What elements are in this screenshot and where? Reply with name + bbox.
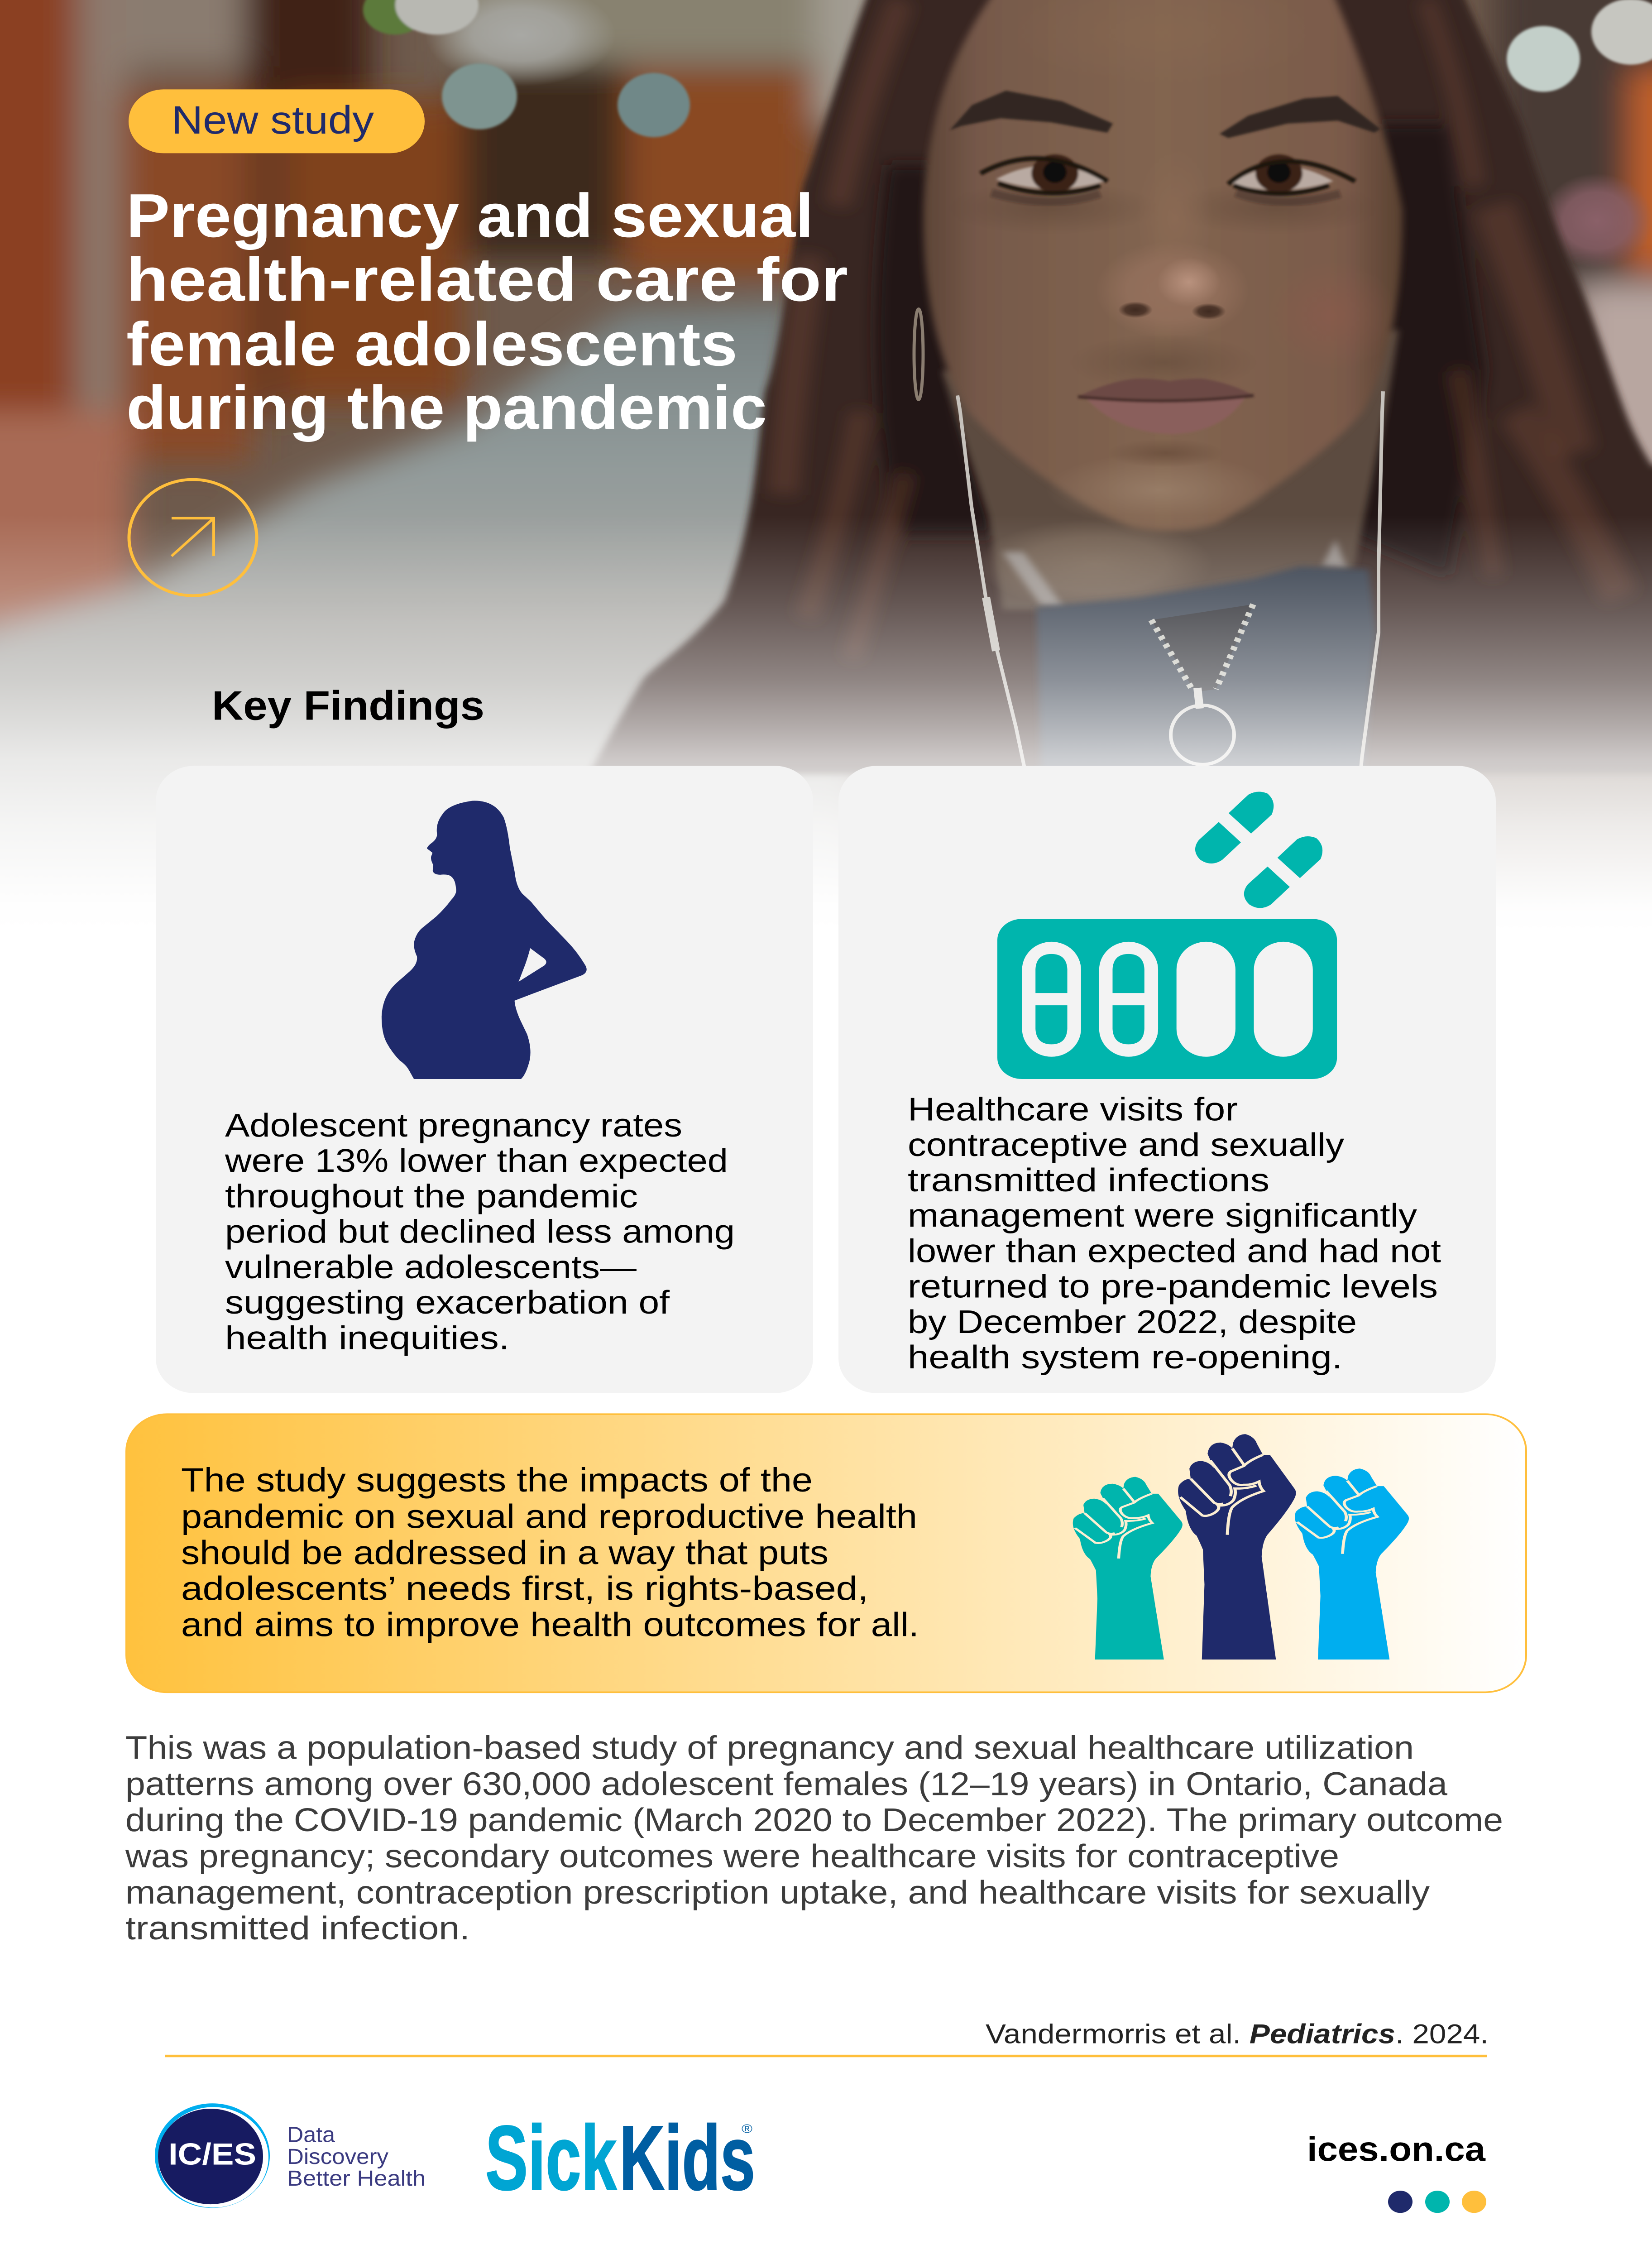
text block: study description: patterns among over 630,000 adolescent females (12–19 years) in Ontario, Canada — [125, 1766, 1447, 1803]
jacket — [1036, 566, 1376, 774]
text: healthcare visits: by December 2022, despite — [908, 1304, 1357, 1340]
brand dots — [1388, 2191, 1486, 2213]
logo tagline: Data — [287, 2122, 335, 2147]
hair — [589, 0, 1652, 774]
citation: Vandermorris et al. Pediatrics. 2024. — [986, 2019, 1489, 2049]
text block: study description — [125, 1730, 1503, 1947]
text block: study description: during the COVID-19 pandemic (March 2020 to December 2022). The primary outcome — [125, 1802, 1503, 1838]
text: healthcare visits: health system re-opening. — [908, 1339, 1342, 1376]
text: pregnancy rates: health inequities. — [225, 1320, 509, 1357]
text: healthcare visits: lower than expected and had not — [908, 1233, 1441, 1270]
text: callout message: should be addressed in a way that puts — [181, 1534, 828, 1572]
face — [924, 0, 1403, 531]
text: pregnancy rates: suggesting exacerbation of — [225, 1284, 670, 1321]
title: health-related care for — [126, 245, 848, 314]
logo: IC/ES — [155, 2103, 426, 2208]
logo tagline — [287, 2122, 426, 2191]
text block: study description: transmitted infection. — [125, 1910, 470, 1947]
text: callout message: pandemic on sexual and reproductive health — [181, 1497, 917, 1535]
lips — [1078, 379, 1254, 434]
text: healthcare visits — [908, 1091, 1441, 1376]
logo: SickKids: Sick — [485, 2107, 617, 2209]
title — [126, 181, 848, 442]
text: callout message: and aims to improve health outcomes for all. — [181, 1606, 919, 1644]
background photo: young woman with earphones — [0, 0, 1652, 1055]
badge: New study: New study — [172, 98, 374, 142]
icon: blister pack and pills — [997, 792, 1337, 1079]
text: pregnancy rates — [225, 1107, 735, 1357]
text block: study description: management, contraception prescription uptake, and healthcare visits for sexually — [125, 1874, 1430, 1911]
heading: Key Findings: Key Findings — [212, 682, 484, 729]
text: healthcare visits: Healthcare visits for — [908, 1091, 1238, 1128]
title: Pregnancy and sexual — [126, 181, 814, 250]
badge: New study — [129, 89, 425, 153]
text block: study description: This was a population-based study of pregnancy and sexual healthcare utilization — [125, 1730, 1414, 1766]
text: pregnancy rates: period but declined less among — [225, 1214, 735, 1250]
text: healthcare visits: management were significantly — [908, 1198, 1417, 1234]
panel: healthcare visits finding — [838, 766, 1496, 1393]
title: female adolescents — [126, 310, 737, 379]
text: pregnancy rates: were 13% lower than expected — [225, 1143, 728, 1179]
logo: SickKids: ® — [742, 2122, 752, 2136]
text: pregnancy rates: Adolescent pregnancy rates — [225, 1107, 682, 1144]
text: pregnancy rates: throughout the pandemic — [225, 1178, 638, 1215]
earphone cords, earring and zipper — [914, 309, 1383, 774]
title: during the pandemic — [126, 373, 767, 442]
panel: study implications callout — [126, 1414, 1526, 1692]
text: pregnancy rates: vulnerable adolescents— — [225, 1249, 637, 1285]
text: callout message: adolescents’ needs first, is rights-based, — [181, 1569, 868, 1607]
icon: pregnant silhouette — [382, 801, 587, 1079]
website link: ices.on.ca — [1307, 2130, 1486, 2169]
icon: arrow in circle — [129, 480, 257, 596]
logo tagline: Discovery — [287, 2144, 389, 2168]
logo: IC/ES: IC/ES — [168, 2137, 256, 2171]
icon: raised fists — [1073, 1434, 1409, 1660]
text block: study description: was pregnancy; secondary outcomes were healthcare visits for contraceptive — [125, 1838, 1339, 1875]
nose — [1118, 302, 1226, 320]
text: healthcare visits: contraceptive and sexually — [908, 1127, 1345, 1163]
eyes — [981, 154, 1355, 201]
brows — [950, 91, 1380, 138]
neck — [942, 330, 1399, 609]
divider rule — [165, 2055, 1487, 2057]
text: healthcare visits: transmitted infections — [908, 1162, 1269, 1199]
logo tagline: Better Health — [287, 2166, 426, 2191]
text: callout message: The study suggests the impacts of the — [181, 1461, 813, 1499]
logo: SickKids: Kids — [619, 2107, 755, 2209]
panel: pregnancy finding — [156, 766, 813, 1393]
text: healthcare visits: returned to pre-pandemic levels — [908, 1268, 1438, 1305]
text: callout message — [181, 1461, 919, 1644]
